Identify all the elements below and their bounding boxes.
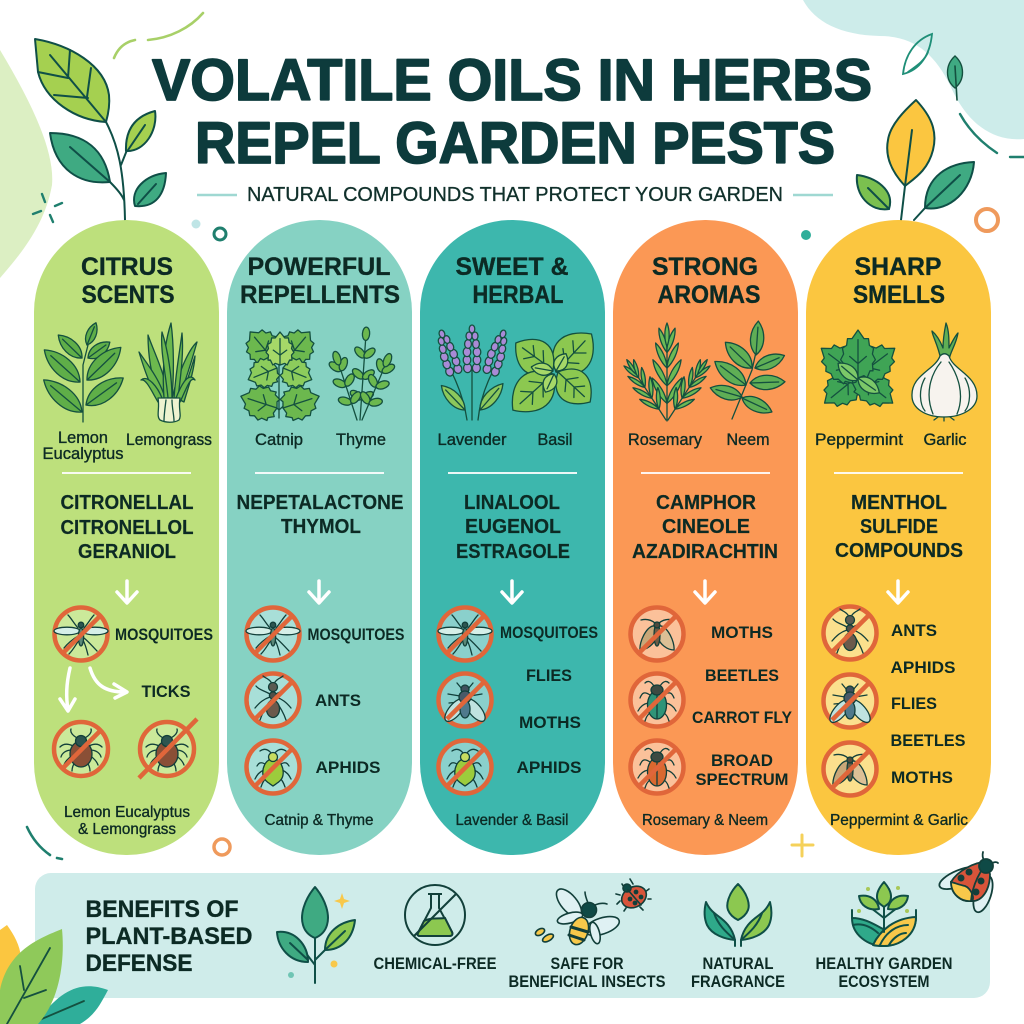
- heading: sharp smells: SMELLS: [853, 281, 945, 309]
- decorative accents: between panels: [27, 827, 813, 859]
- icon: no mosquitoes: [438, 608, 492, 660]
- herb labels: Thyme: [336, 431, 386, 449]
- heading: strong aromas: STRONG: [652, 253, 758, 281]
- compounds: CAMPHOR: [656, 492, 757, 514]
- icon: no mosquitoes: [54, 608, 108, 660]
- arrow: [117, 581, 137, 603]
- label: natural fragrance: FRAGRANCE: [691, 973, 785, 991]
- label: safe for beneficial insects: BENEFICIAL INSECTS: [508, 973, 666, 991]
- heading: benefits: [86, 896, 252, 977]
- background blob: top right: [803, 0, 1024, 139]
- label: safe for beneficial insects: SAFE FOR: [550, 955, 624, 973]
- icon: no broad spectrum pests: [630, 740, 684, 794]
- compounds: GERANIOL: [78, 541, 176, 563]
- heading: powerful repellents: [240, 253, 400, 309]
- compounds: MENTHOL: [851, 492, 947, 514]
- icon: basil: [500, 321, 606, 424]
- icon: no ticks 2: [139, 719, 197, 778]
- heading: benefits: BENEFITS OF: [86, 896, 238, 923]
- icon: lemongrass: [139, 323, 197, 422]
- label: chemical-free: CHEMICAL-FREE: [374, 955, 496, 973]
- herb labels: [438, 431, 572, 449]
- compounds: [835, 492, 963, 562]
- pest labels: SPECTRUM: [696, 770, 788, 789]
- herb labels: [42, 429, 212, 463]
- pest labels: MOTHS: [891, 768, 953, 787]
- pest labels: APHIDS: [890, 658, 956, 677]
- heading: powerful repellents: POWERFUL: [248, 253, 390, 281]
- icon: no ants: [246, 674, 300, 726]
- icon: lemon eucalyptus: [38, 321, 129, 422]
- panel: benefits: [35, 873, 990, 998]
- icon: plant sprig: [277, 887, 355, 983]
- heading: powerful repellents: REPELLENTS: [240, 281, 400, 309]
- title: [152, 48, 872, 176]
- heading: sharp smells: SHARP: [854, 253, 942, 281]
- icon: peppermint: [811, 330, 905, 417]
- herb labels: Catnip: [255, 431, 303, 449]
- heading: strong aromas: AROMAS: [658, 281, 760, 309]
- label: natural fragrance: [691, 955, 785, 991]
- compounds: [456, 492, 570, 563]
- herb labels: Rosemary: [628, 431, 703, 449]
- arrow: [888, 581, 908, 603]
- compounds: EUGENOL: [465, 516, 561, 538]
- arrow: [502, 581, 522, 603]
- plant source label: Lavender & Basil: [456, 812, 568, 829]
- plant source label: [64, 804, 190, 838]
- heading: sweet and herbal: HERBAL: [472, 281, 564, 309]
- arrow: [309, 581, 329, 603]
- pest labels: [692, 623, 793, 789]
- icon: catnip: [235, 321, 325, 425]
- label: mosquitoes: MOSQUITOES: [115, 625, 213, 644]
- icon: natural fragrance: [705, 884, 771, 946]
- compounds: [632, 492, 778, 563]
- pest labels: APHIDS: [516, 758, 582, 777]
- heading: strong aromas: [652, 253, 760, 309]
- heading: sharp smells: [853, 253, 945, 309]
- heading: benefits: DEFENSE: [86, 950, 192, 977]
- icon: chemical-free flask: [405, 885, 465, 945]
- heading: sweet and herbal: SWEET &: [456, 253, 568, 281]
- pest labels: BROAD: [711, 751, 773, 770]
- label: safe for beneficial insects: [508, 955, 666, 991]
- icon: rosemary: [616, 323, 718, 427]
- pest labels: BEETLES: [705, 666, 779, 685]
- plant source label: & Lemongrass: [78, 821, 176, 838]
- pest labels: MOTHS: [519, 713, 581, 732]
- heading: citrus scents: [81, 253, 174, 309]
- pest labels: FLIES: [891, 694, 937, 713]
- label: healthy garden ecosystem: ECOSYSTEM: [838, 973, 930, 991]
- compounds: CITRONELLOL: [60, 517, 194, 539]
- panel: sharp smells: [806, 220, 991, 855]
- compounds: LINALOOL: [464, 492, 560, 514]
- icon: thyme: [322, 326, 402, 425]
- icon: no moths: [630, 608, 684, 660]
- panel: sweet and herbal: [420, 220, 606, 855]
- compounds: NEPETALACTONE: [236, 492, 404, 514]
- icon: neem: [708, 321, 787, 419]
- herb labels: Lemon: [58, 429, 108, 447]
- heading: citrus scents: SCENTS: [82, 281, 174, 309]
- herb labels: Basil: [538, 431, 572, 449]
- icon: healthy garden ecosystem: [852, 882, 916, 946]
- herb labels: [815, 431, 966, 449]
- compounds: THYMOL: [281, 516, 361, 538]
- panel: strong aromas: [613, 220, 798, 855]
- icon: no beetles: [630, 674, 684, 726]
- panel: powerful repellents: [227, 220, 412, 855]
- herb labels: Neem: [726, 431, 770, 449]
- label: mosquitoes: MOSQUITOES: [308, 625, 404, 644]
- background blob: left: [0, 50, 52, 278]
- compounds: SULFIDE: [860, 516, 938, 538]
- heading: sweet and herbal: [456, 253, 568, 309]
- decorative leaves: bottom left: [0, 925, 108, 1024]
- herb labels: Eucalyptus: [42, 445, 124, 463]
- icon: lavender: [433, 325, 512, 420]
- herb labels: [628, 431, 770, 449]
- panel: citrus scents: [34, 220, 219, 855]
- arrow: [695, 581, 715, 603]
- pest labels: BEETLES: [890, 731, 966, 750]
- compounds: AZADIRACHTIN: [632, 541, 778, 563]
- compounds: CITRONELLAL: [60, 492, 194, 514]
- pest labels: ANTS: [891, 621, 937, 640]
- icon: no ticks 1: [54, 722, 108, 776]
- compounds: ESTRAGOLE: [456, 541, 570, 563]
- icon: ladybug: [937, 852, 998, 915]
- herb labels: [255, 431, 386, 449]
- plant source label: Lemon Eucalyptus: [64, 804, 190, 821]
- icon: no aphids: [438, 740, 492, 794]
- pest labels: MOSQUITOES: [500, 623, 598, 642]
- icon: garlic: [912, 323, 977, 421]
- herb labels: Lavender: [438, 431, 507, 449]
- title: VOLATILE OILS IN HERBS: [152, 48, 872, 113]
- title: REPEL GARDEN PESTS: [195, 111, 835, 176]
- heading: citrus scents: CITRUS: [81, 253, 173, 281]
- label: natural fragrance: NATURAL: [702, 955, 774, 973]
- pest labels: [500, 623, 598, 777]
- decorative accents: top left: [33, 13, 226, 240]
- icon: no mosquitoes: [246, 608, 300, 660]
- compounds: COMPOUNDS: [835, 540, 963, 562]
- pest labels: FLIES: [526, 666, 572, 685]
- icon: no aphids: [246, 740, 300, 794]
- heading: benefits: PLANT-BASED: [86, 923, 252, 950]
- pest labels: MOTHS: [711, 623, 773, 642]
- herb labels: Garlic: [924, 431, 966, 449]
- decorative accents: top right: [801, 34, 1024, 240]
- icon: no ants: [824, 606, 876, 660]
- herb labels: Peppermint: [815, 431, 903, 449]
- decorative plant: top right: [857, 100, 974, 220]
- label: ticks: TICKS: [142, 682, 190, 701]
- pest labels: CARROT FLY: [692, 708, 793, 727]
- label: ants: ANTS: [315, 691, 361, 710]
- pest labels: [890, 621, 966, 787]
- icon: bee and ladybug: [534, 879, 651, 947]
- plant source label: Peppermint & Garlic: [830, 812, 968, 829]
- compounds: CINEOLE: [662, 516, 750, 538]
- plant source label: Catnip & Thyme: [264, 812, 374, 829]
- compounds: [236, 492, 404, 538]
- label: healthy garden ecosystem: HEALTHY GARDEN: [816, 955, 952, 973]
- decorative plant: top left: [35, 39, 166, 220]
- icon: no flies: [824, 674, 876, 728]
- branch arrows: [60, 668, 127, 711]
- plant source label: Rosemary & Neem: [642, 812, 768, 829]
- icon: no moths: [824, 742, 876, 796]
- compounds: [60, 492, 194, 563]
- herb labels: Lemongrass: [126, 431, 212, 449]
- label: healthy garden ecosystem: [816, 955, 952, 991]
- subtitle: NATURAL COMPOUNDS THAT PROTECT YOUR GARDEN: [247, 184, 783, 206]
- label: aphids: APHIDS: [316, 758, 380, 777]
- icon: no flies: [438, 674, 492, 726]
